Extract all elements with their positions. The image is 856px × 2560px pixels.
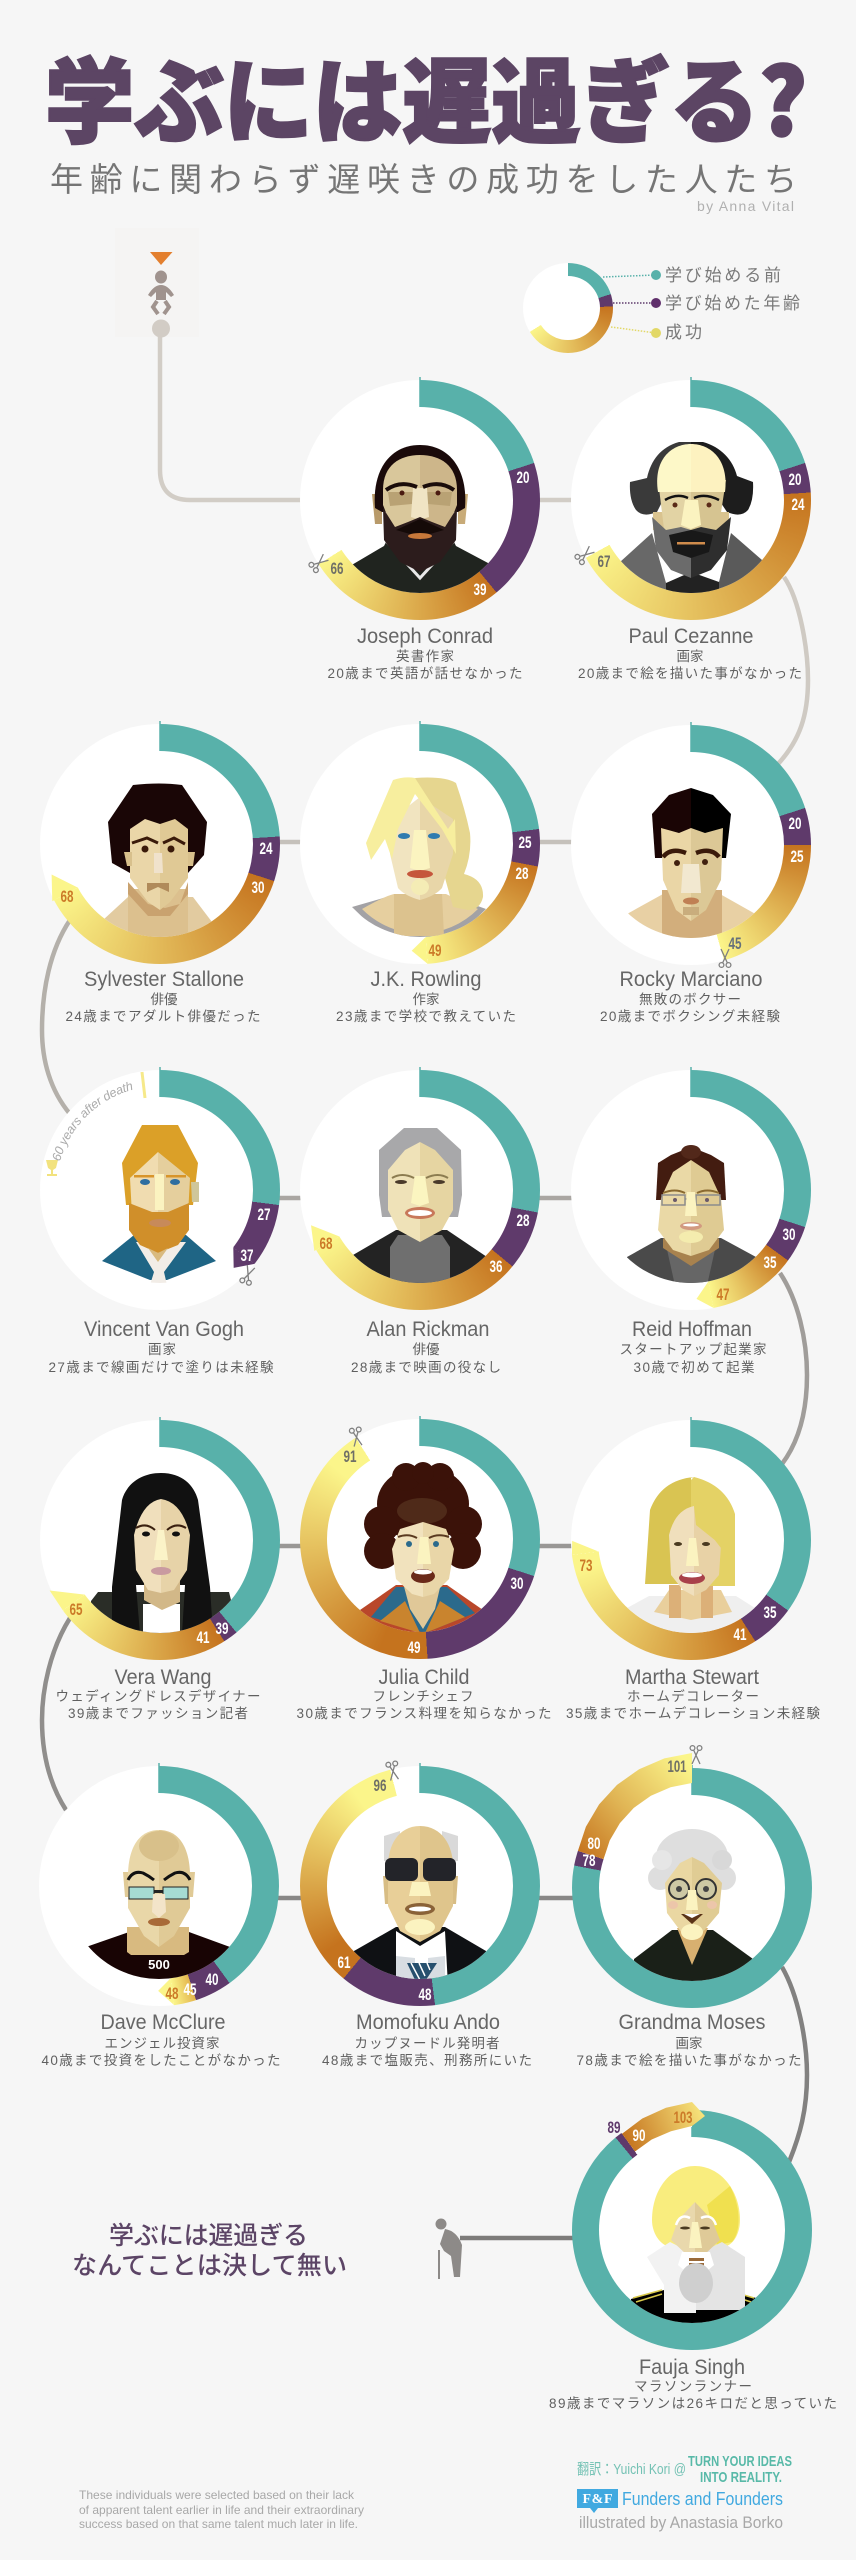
panel: Alan Rickman: 俳優: [412, 1342, 440, 1357]
panel: Dave McClure: Dave McClure: [100, 2011, 226, 2034]
panel: Joseph Conrad: 英書作家: [396, 648, 454, 664]
panel: Reid Hoffman: 30: [782, 1225, 796, 1244]
panel: Vera Wang: 41: [196, 1628, 210, 1647]
panel: Fauja Singh: 103: [674, 2108, 692, 2127]
panel: Rocky Marciano: 20: [788, 814, 802, 833]
panel: Julia Child: Julia Child: [378, 1666, 470, 1689]
panel: Rocky Marciano: Rocky Marciano: [620, 968, 762, 991]
panel: Alan Rickman: 28: [516, 1211, 530, 1230]
panel: Reid Hoffman: 30歳で初めて起業: [634, 1360, 755, 1375]
panel: Reid Hoffman: Reid Hoffman: [632, 1318, 752, 1341]
legend labels: 成功: [665, 318, 702, 343]
panel: Julia Child: フレンチシェフ: [372, 1689, 474, 1704]
panel: Martha Stewart: 35: [764, 1603, 776, 1622]
panel: Alan Rickman: Alan Rickman: [366, 1318, 490, 1341]
panel: Joseph Conrad: 39: [474, 580, 486, 599]
panel: Momofuku Ando: 48: [418, 1985, 432, 2004]
panel: Joseph Conrad: 66: [330, 559, 344, 578]
panel: J.K. Rowling: 25: [518, 833, 532, 852]
title: 年齢に関わらず遅咲きの成功をした人たち: [50, 153, 797, 201]
title: 学ぶには遅過ぎる?: [45, 29, 807, 162]
panel: Sylvester Stallone: 24: [260, 839, 273, 858]
panel: Martha Stewart: 73: [580, 1556, 592, 1575]
panel: Paul Cezanne: 24: [792, 495, 805, 514]
panel: Grandma Moses: 画家: [676, 2036, 702, 2051]
panel: Paul Cezanne: Paul Cezanne: [628, 625, 754, 648]
credits: 翻訳：Yuichi Kori @: [577, 2461, 686, 2478]
disclaimer text: success based on that same talent much later in life.: [79, 2517, 358, 2531]
credits: TURN YOUR IDEAS: [688, 2453, 792, 2470]
panel: Vera Wang: Vera Wang: [114, 1666, 212, 1689]
panel: Martha Stewart: Martha Stewart: [625, 1666, 759, 1689]
panel: Vera Wang: 39歳までファッション記者: [68, 1706, 248, 1721]
panel: Julia Child: [296, 1416, 552, 1721]
panel: Joseph Conrad: 20: [516, 468, 530, 487]
panel: J.K. Rowling: 28: [516, 864, 528, 883]
panel: Dave McClure: エンジェル投資家: [104, 2036, 220, 2051]
credits: [577, 2453, 792, 2532]
panel: Alan Rickman: [300, 1067, 540, 1375]
panel: Joseph Conrad: [300, 377, 540, 681]
panel: Joseph Conrad: 20歳まで英語が話せなかった: [328, 665, 522, 681]
panel: Momofuku Ando: 61: [338, 1953, 350, 1972]
panel: Grandma Moses: 78歳まで絵を描いた事がなかった: [576, 2053, 802, 2068]
credits: illustrated by Anastasia Borko: [579, 2513, 783, 2532]
disclaimer text: [79, 2488, 364, 2531]
panel: Alan Rickman: 28歳まで映画の役なし: [351, 1360, 501, 1375]
logo: F&F: [577, 2489, 618, 2513]
closing message: [72, 2216, 347, 2282]
panel: Sylvester Stallone: 30: [252, 878, 264, 897]
panel: Sylvester Stallone: Sylvester Stallone: [84, 968, 244, 991]
panel: Julia Child: 30歳までフランス料理を知らなかった: [296, 1705, 552, 1721]
panel: Paul Cezanne: 画家: [676, 649, 704, 664]
panel: Vera Wang: ウェディングドレスデザイナー: [56, 1688, 260, 1704]
panel: Julia Child: 49: [408, 1638, 420, 1657]
legend labels: [603, 261, 800, 343]
closing message: 学ぶには遅過ぎる: [109, 2216, 308, 2252]
panel: Julia Child: 91: [344, 1447, 356, 1466]
panel: Paul Cezanne: 20歳まで絵を描いた事がなかった: [578, 666, 802, 681]
panel: Rocky Marciano: 20歳までボクシング未経験: [600, 1009, 780, 1024]
panel: Dave McClure: 45: [184, 1980, 196, 1999]
panel: J.K. Rowling: 作家: [412, 992, 440, 1007]
panel: Rocky Marciano: 25: [790, 847, 804, 866]
logo: F&F: F&F: [582, 2492, 612, 2507]
panel: Alan Rickman: 68: [320, 1234, 332, 1253]
legend ring: [523, 263, 613, 353]
legend: [523, 261, 800, 353]
panel: Grandma Moses: 101: [668, 1757, 686, 1776]
panel: Fauja Singh: [549, 2102, 837, 2411]
panel: Sylvester Stallone: 俳優: [150, 992, 178, 1007]
panel: Dave McClure: 40: [206, 1970, 218, 1989]
panel: Rocky Marciano: [571, 722, 811, 1024]
panel: J.K. Rowling: J.K. Rowling: [370, 968, 482, 991]
credits: INTO REALITY.: [700, 2469, 782, 2486]
panel: Julia Child: 30: [510, 1574, 524, 1593]
panel: Vera Wang: [40, 1417, 280, 1721]
panel: Martha Stewart: [566, 1417, 820, 1721]
panel: Vincent Van Gogh: [40, 1067, 280, 1375]
panel: Fauja Singh: 89歳までマラソンは26キロだと思っていた: [549, 2396, 837, 2411]
panel: Fauja Singh: 90: [632, 2126, 646, 2145]
panel: Paul Cezanne: 20: [788, 470, 802, 489]
panel: Martha Stewart: 41: [734, 1625, 746, 1644]
panel: Grandma Moses: 80: [588, 1834, 600, 1853]
panel: Momofuku Ando: [300, 1760, 540, 2068]
panel: Reid Hoffman: 35: [764, 1253, 776, 1272]
panel: Reid Hoffman: [571, 1067, 811, 1375]
panel: Dave McClure: 40歳まで投資をしたことがなかった: [42, 2053, 280, 2068]
panel: Martha Stewart: ホームデコレーター: [627, 1688, 759, 1704]
panel: Sylvester Stallone: [40, 721, 280, 1024]
panel: Paul Cezanne: 67: [598, 552, 610, 571]
panel: J.K. Rowling: 49: [428, 941, 442, 960]
panel: Reid Hoffman: スタートアップ起業家: [620, 1342, 766, 1357]
disclaimer text: These individuals were selected based on their lack: [79, 2488, 355, 2502]
panel: Dave McClure: 500: [148, 1957, 170, 1972]
panel: J.K. Rowling: 23歳まで学校で教えていた: [336, 1009, 516, 1024]
panel: Fauja Singh: 89: [608, 2118, 620, 2137]
panel: Alan Rickman: 36: [490, 1257, 502, 1276]
title: by Anna Vital: [697, 198, 794, 214]
legend labels: 学び始めた年齢: [665, 289, 800, 314]
icon: trophy: [46, 1160, 58, 1176]
closing message: なんてことは決して無い: [72, 2246, 347, 2282]
panel: Vincent Van Gogh: Vincent Van Gogh: [84, 1318, 244, 1341]
panel: Vincent Van Gogh: 画家: [148, 1342, 176, 1357]
panel: Rocky Marciano: 無敗のボクサー: [639, 992, 741, 1007]
disclaimer text: of apparent talent earlier in life and their extraordinary: [79, 2503, 364, 2517]
panel: Fauja Singh: マラソンランナー: [634, 2379, 752, 2394]
icon: baby start marker: [148, 252, 174, 338]
panel: J.K. Rowling: [300, 721, 540, 1024]
panel: Momofuku Ando: 96: [374, 1776, 386, 1795]
panel: Momofuku Ando: カップヌードル発明者: [354, 2036, 500, 2051]
panel: Vera Wang: 39: [216, 1619, 228, 1638]
panel: Grandma Moses: 78: [582, 1851, 596, 1870]
panel: Grandma Moses: Grandma Moses: [618, 2011, 766, 2034]
panel: Momofuku Ando: Momofuku Ando: [356, 2011, 500, 2034]
panel: Martha Stewart: 35歳までホームデコレーション未経験: [566, 1705, 820, 1721]
panel: Sylvester Stallone: 68: [60, 887, 74, 906]
panel: Dave McClure: [39, 1763, 280, 2068]
panel: Vincent Van Gogh: 60 years after death: [52, 1082, 132, 1160]
panel: Momofuku Ando: 48歳まで塩販売、刑務所にいた: [322, 2053, 532, 2068]
panel: Sylvester Stallone: 24歳までアダルト俳優だった: [66, 1009, 260, 1024]
credits: Funders and Founders: [622, 2489, 783, 2509]
panel: Vera Wang: 65: [70, 1600, 82, 1619]
legend labels: 学び始める前: [665, 261, 781, 286]
panel: Joseph Conrad: Joseph Conrad: [357, 625, 493, 648]
panel: Grandma Moses: [572, 1745, 812, 2068]
panel: Vincent Van Gogh: 27歳まで線画だけで塗りは未経験: [48, 1360, 274, 1375]
panel: Paul Cezanne: [571, 377, 811, 681]
panel: Reid Hoffman: 47: [716, 1285, 730, 1304]
panel: Rocky Marciano: 45: [728, 934, 742, 953]
panel: Dave McClure: 48: [166, 1984, 178, 2003]
panel: Fauja Singh: Fauja Singh: [639, 2356, 745, 2379]
icon: old man with cane: [436, 2218, 462, 2279]
panel: Vincent Van Gogh: 27: [258, 1205, 270, 1224]
panel: Vincent Van Gogh: 37: [240, 1246, 254, 1265]
